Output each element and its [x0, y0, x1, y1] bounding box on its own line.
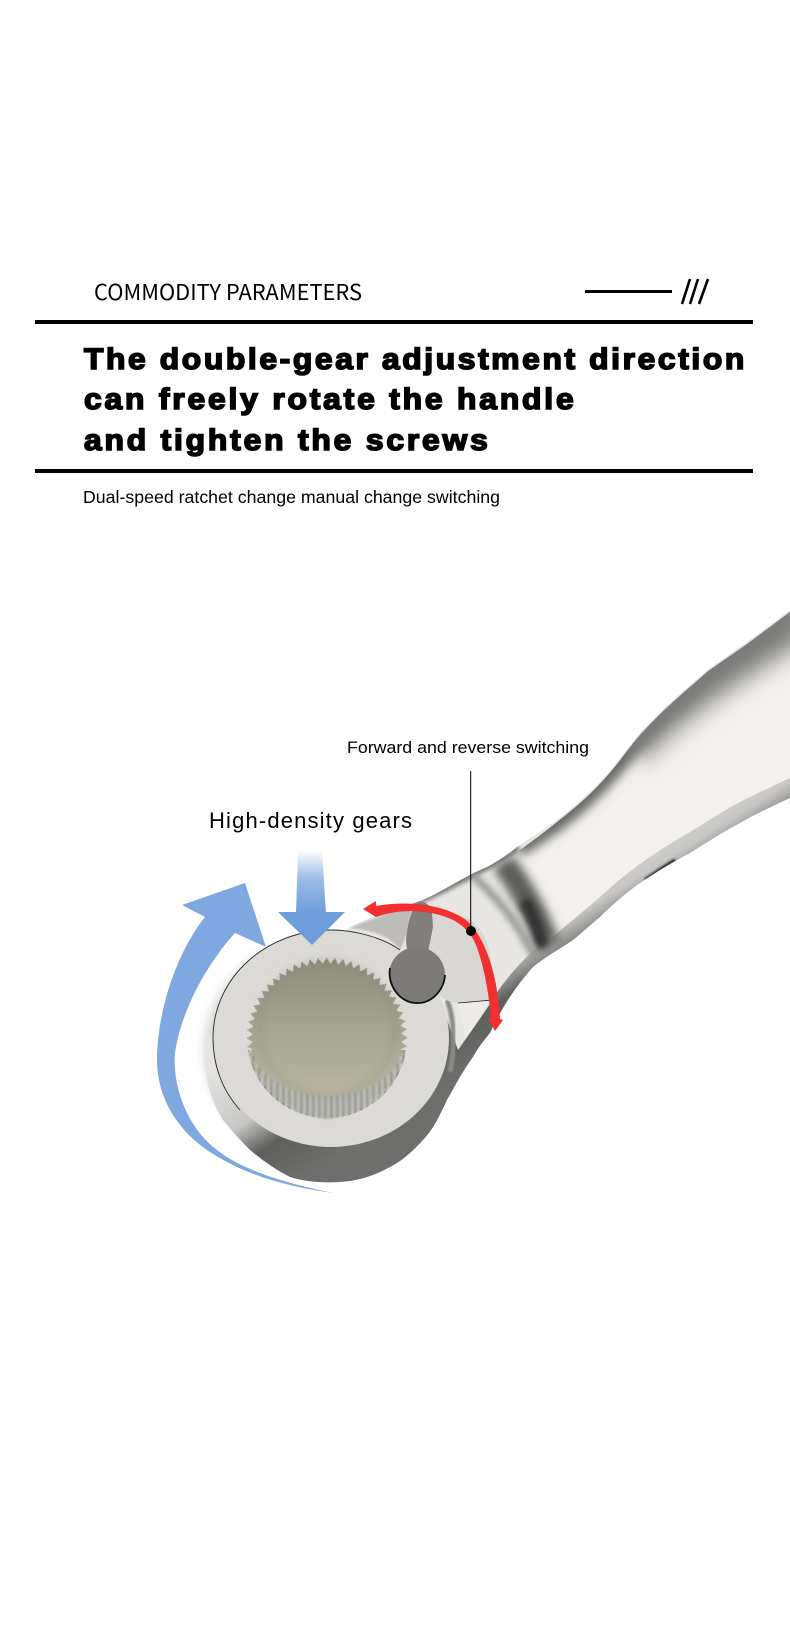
wrench top face — [213, 930, 449, 1147]
neck shoulder line — [473, 876, 533, 955]
leader line — [470, 771, 472, 931]
wrench illustration — [204, 600, 790, 1182]
face upper-left outline — [213, 930, 400, 1110]
lever knob — [389, 947, 445, 1003]
neck dark band — [503, 862, 548, 945]
big curved blue arrow — [157, 883, 333, 1193]
bottom heavy rule — [35, 469, 753, 473]
callout: high-density gears: High-density gears — [209, 808, 412, 833]
heading: and tighten the screws — [84, 423, 488, 457]
blue down arrow — [278, 850, 345, 945]
heading: can freely rotate the handle — [84, 382, 574, 416]
chrome block left of lever — [350, 905, 412, 950]
subheading: Dual-speed ratchet change manual change switching — [83, 487, 500, 507]
infographic canvas — [35, 278, 790, 1193]
switching disc — [425, 913, 493, 1003]
neck top shading — [400, 845, 517, 905]
chrome triangle below disc — [457, 1001, 491, 1040]
neck polished area — [350, 870, 540, 1050]
switch lever — [389, 902, 445, 1003]
lever stem — [406, 902, 433, 952]
arrow head — [278, 912, 345, 945]
gear teeth — [248, 959, 406, 1117]
callout text: Forward and reverse switching — [347, 738, 589, 757]
chrome groove near face — [447, 1000, 453, 1072]
lever knob outline — [390, 968, 445, 1003]
heading: The double-gear adjustment direction — [84, 342, 744, 376]
heading — [84, 342, 744, 457]
neck dark core — [524, 900, 542, 948]
handle upper right deep shading — [625, 615, 790, 745]
lower rim dark spot — [645, 860, 675, 880]
wrench silhouette — [204, 610, 790, 1182]
leader dot — [466, 926, 476, 936]
section label: COMMODITY PARAMETERS — [94, 275, 362, 307]
callout: forward and reverse switching — [347, 738, 589, 936]
arrow stem — [296, 850, 326, 913]
handle polished surface — [516, 612, 790, 940]
disc outline — [458, 1000, 492, 1003]
wrench head soft shadow — [204, 938, 440, 1162]
red switching arrow — [363, 901, 503, 1031]
gear inner shade — [259, 960, 395, 1096]
gear wall lower ring — [248, 1050, 406, 1118]
gear wall bottom crescent — [250, 1050, 404, 1119]
header ornament: line and slashes — [585, 279, 708, 304]
top heavy rule — [35, 320, 753, 324]
handle upper edge shading — [517, 610, 790, 847]
